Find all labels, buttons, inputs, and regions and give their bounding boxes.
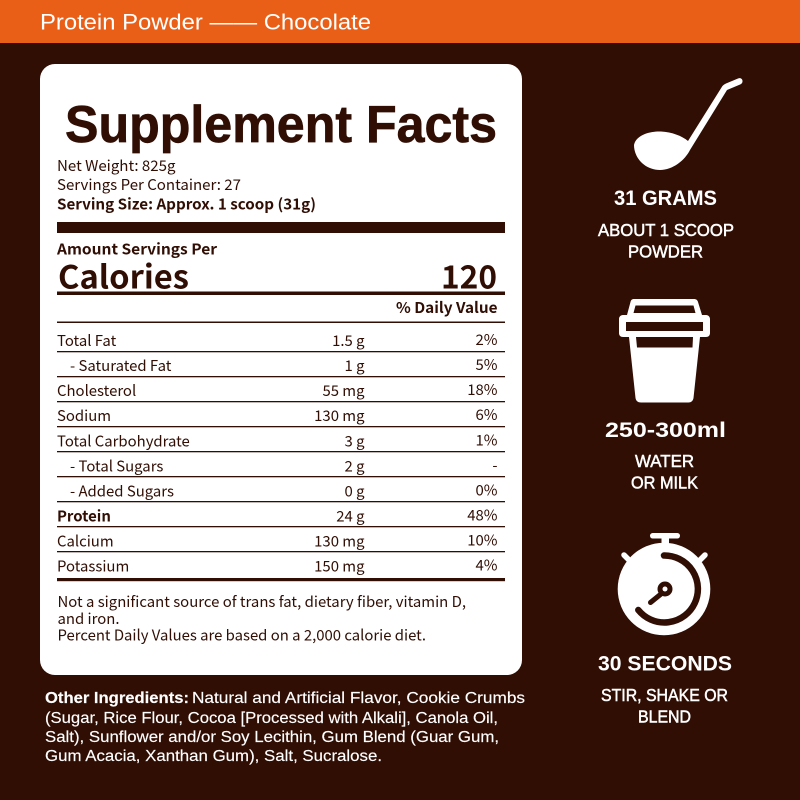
footnote: and iron. xyxy=(58,608,120,629)
calories summary xyxy=(56,238,497,298)
row: total carbohydrate: Total Carbohydrate xyxy=(57,430,190,451)
row: calcium: 130 mg xyxy=(314,530,365,552)
row: added sugars: - Added Sugars xyxy=(70,480,174,501)
row: total sugars: 2 g xyxy=(344,455,365,476)
row: cholesterol: 55 mg xyxy=(322,380,365,401)
row: calcium: Calcium xyxy=(57,530,114,552)
serving information: Servings Per Container: 27 xyxy=(57,174,241,195)
calories summary: Amount Servings Per xyxy=(56,238,218,260)
mixing time label xyxy=(598,652,732,726)
serving information xyxy=(57,155,316,214)
header banner: Protein Powder —— Chocolate xyxy=(40,10,371,34)
row: total fat: 1.5 g xyxy=(332,330,365,351)
other ingredients text: (Sugar, Rice Flour, Cocoa [Processed with Alkali], Canola Oil, xyxy=(45,710,498,727)
icon: stopwatch xyxy=(618,533,710,635)
scoop amount label: 31 GRAMS xyxy=(614,187,717,210)
row: protein: Protein xyxy=(57,506,111,526)
mixing time label: 30 SECONDS xyxy=(598,652,732,676)
calories summary: 120 xyxy=(441,252,497,298)
water amount label: OR MILK xyxy=(631,472,698,492)
row: potassium: Potassium xyxy=(57,556,129,576)
other ingredients text: Natural and Artificial Flavor, Cookie Crumbs xyxy=(192,690,525,707)
row: protein: 24 g xyxy=(336,506,365,526)
row: total carbohydrate: 3 g xyxy=(344,430,365,451)
scoop amount label: POWDER xyxy=(628,242,703,262)
row: cholesterol: 18% xyxy=(467,379,498,400)
water amount label: WATER xyxy=(635,451,694,471)
row: saturated fat: 5% xyxy=(476,354,498,375)
other ingredients text: Salt), Sunflower and/or Soy Lecithin, Gum Blend (Guar Gum, xyxy=(45,729,499,746)
nutrient table xyxy=(57,329,505,576)
other ingredients text: Gum Acacia, Xanthan Gum), Salt, Sucralose. xyxy=(45,748,382,765)
row: added sugars: 0 g xyxy=(344,480,365,501)
row: potassium xyxy=(57,554,498,576)
row: calcium: 10% xyxy=(467,530,498,550)
row: protein xyxy=(57,504,498,526)
panel: supplement facts xyxy=(40,64,522,675)
water amount label xyxy=(605,419,726,492)
row: sodium: Sodium xyxy=(57,405,111,426)
row: cholesterol: Cholesterol xyxy=(57,380,136,401)
mixing time label: STIR, SHAKE OR xyxy=(601,685,728,705)
row: cholesterol xyxy=(57,379,498,401)
row: saturated fat: - Saturated Fat xyxy=(70,355,172,376)
serving information: Net Weight: 825g xyxy=(57,155,176,176)
row: total sugars xyxy=(70,454,498,476)
row: protein: 48% xyxy=(467,504,498,526)
row: total carbohydrate: 1% xyxy=(476,429,498,450)
mixing time label: BLEND xyxy=(638,706,691,726)
row: potassium: 150 mg xyxy=(314,556,365,576)
footnote xyxy=(58,591,466,646)
row: total sugars: - xyxy=(492,454,498,475)
row: saturated fat: 1 g xyxy=(344,355,365,376)
scoop amount label: ABOUT 1 SCOOP xyxy=(598,220,734,240)
icon: scoop xyxy=(634,78,742,170)
other ingredients text: Other Ingredients: xyxy=(45,690,189,707)
footnote: Percent Daily Values are based on a 2,000 calorie diet. xyxy=(58,624,426,646)
icon: shaker cup xyxy=(619,299,710,402)
row: total carbohydrate xyxy=(57,429,498,451)
row: total fat: 2% xyxy=(476,329,498,350)
footnote: Not a significant source of trans fat, dietary fiber, vitamin D, xyxy=(58,591,466,612)
row: sodium: 6% xyxy=(476,404,498,425)
heading: supplement facts: Supplement Facts xyxy=(65,96,497,154)
row: total sugars: - Total Sugars xyxy=(70,455,163,476)
row: sodium xyxy=(57,404,498,426)
row: saturated fat xyxy=(70,354,498,376)
row: potassium: 4% xyxy=(476,554,498,576)
water amount label: 250-300ml xyxy=(605,419,726,442)
row: sodium: 130 mg xyxy=(314,405,365,426)
other ingredients text xyxy=(45,690,525,765)
serving information: Serving Size: Approx. 1 scoop (31g) xyxy=(57,194,316,214)
row: calcium xyxy=(57,530,498,552)
daily value column heading: % Daily Value xyxy=(396,297,498,318)
row: added sugars xyxy=(70,479,498,501)
row: total fat xyxy=(57,329,498,351)
calories summary: Calories xyxy=(58,252,189,298)
header banner xyxy=(0,0,800,43)
row: total fat: Total Fat xyxy=(57,330,117,351)
row: added sugars: 0% xyxy=(476,479,498,500)
scoop amount label xyxy=(598,187,734,262)
